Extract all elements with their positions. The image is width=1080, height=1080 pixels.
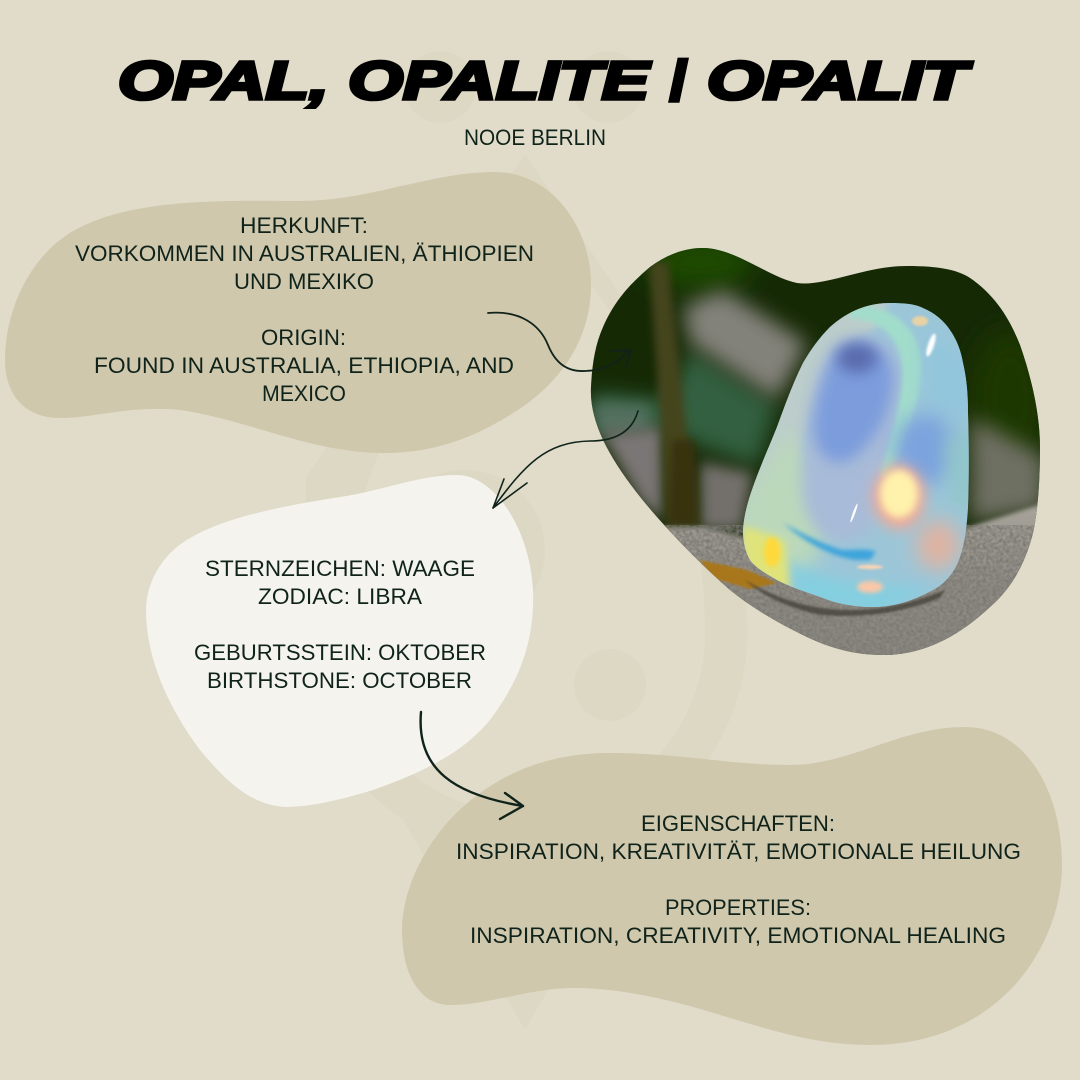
title: | — [668, 53, 689, 100]
text block: origin: HERKUNFT: — [240, 213, 368, 238]
text block: zodiac and birthstone: BIRTHSTONE: OCTOBER — [207, 668, 472, 693]
text block: origin: FOUND IN AUSTRALIA, ETHIOPIA, AND — [94, 353, 514, 378]
text block: zodiac and birthstone: ZODIAC: LIBRA — [258, 584, 422, 609]
watermark: moon and eye emblem — [303, 51, 747, 1012]
photo: polished opal on rock — [585, 236, 1050, 660]
panel: origin blob — [5, 172, 591, 453]
lower body and yellow edge — [788, 558, 922, 607]
text block: properties — [456, 811, 1021, 948]
milky outer rim — [744, 303, 890, 524]
photo rock ground — [664, 502, 1038, 655]
title: OPAL, OPALITE — [118, 51, 652, 111]
text block: properties: PROPERTIES: — [665, 895, 811, 920]
text block: properties: INSPIRATION, KREATIVITÄT, EMOTIONALE HEILUNG — [456, 839, 1021, 864]
blue right body — [933, 340, 968, 424]
inner blue arch — [798, 351, 894, 538]
text block: origin: VORKOMMEN IN AUSTRALIEN, ÄTHIOPIEN — [75, 241, 534, 266]
teal arch band — [850, 307, 922, 480]
title — [118, 51, 972, 111]
text block: properties: INSPIRATION, CREATIVITY, EMOTIONAL HEALING — [470, 923, 1006, 948]
opal stone — [743, 303, 969, 607]
title: OPALIT — [707, 51, 972, 111]
text block: origin — [75, 213, 534, 406]
text block: properties: EIGENSCHAFTEN: — [641, 811, 835, 836]
photo background foliage — [585, 236, 1050, 660]
text block: origin: MEXICO — [262, 381, 346, 406]
subtitle: NOOE BERLIN — [464, 125, 606, 150]
orange fire glow — [873, 465, 925, 529]
text block: origin: UND MEXIKO — [234, 269, 374, 294]
panel: properties blob — [402, 727, 1062, 1045]
panel: zodiac blob — [146, 475, 533, 807]
arrow: zodiac to properties — [421, 712, 523, 819]
text block: origin: ORIGIN: — [261, 325, 346, 350]
arrow: origin to photo — [488, 313, 631, 371]
arrow: photo to zodiac — [493, 411, 638, 508]
text block: zodiac and birthstone — [194, 556, 486, 693]
text block: zodiac and birthstone: STERNZEICHEN: WAAGE — [205, 556, 475, 581]
text block: zodiac and birthstone: GEBURTSSTEIN: OKTOBER — [194, 640, 486, 665]
